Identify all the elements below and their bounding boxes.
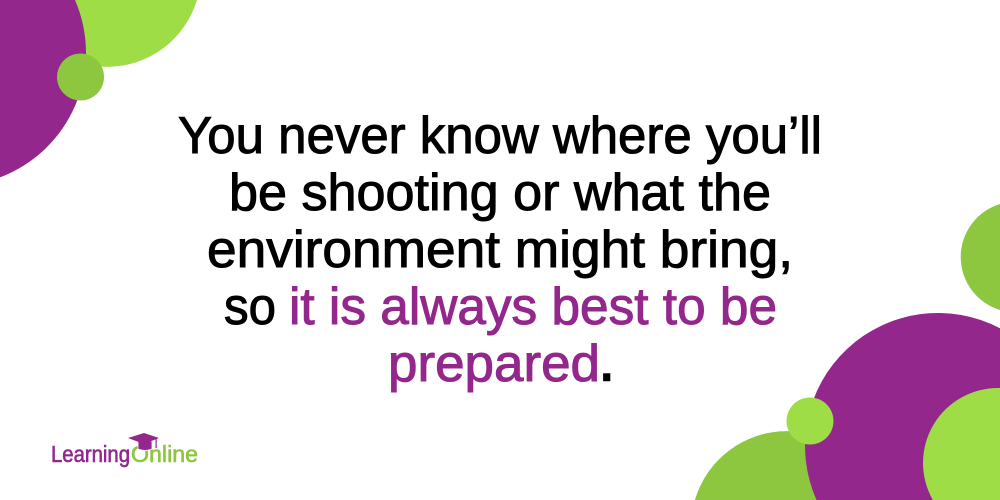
quote text: it is always best to be	[289, 278, 777, 336]
logo: Learning Online: Online	[131, 441, 198, 467]
logo wordmark: Learning	[51, 441, 130, 467]
logo: Learning Online	[51, 433, 198, 467]
quote text: You never know where you’ll	[178, 107, 822, 165]
quote text	[178, 107, 822, 396]
icon: graduation cap	[128, 433, 159, 450]
quote text: be shooting or what the	[229, 164, 771, 222]
quote text: .	[597, 318, 616, 396]
decorative circles: top left	[0, 0, 197, 177]
quote text: so	[224, 278, 276, 336]
quote text: environment might bring,	[207, 221, 793, 279]
quote text: prepared	[388, 335, 600, 393]
decorative circles: bottom right	[695, 204, 1000, 500]
